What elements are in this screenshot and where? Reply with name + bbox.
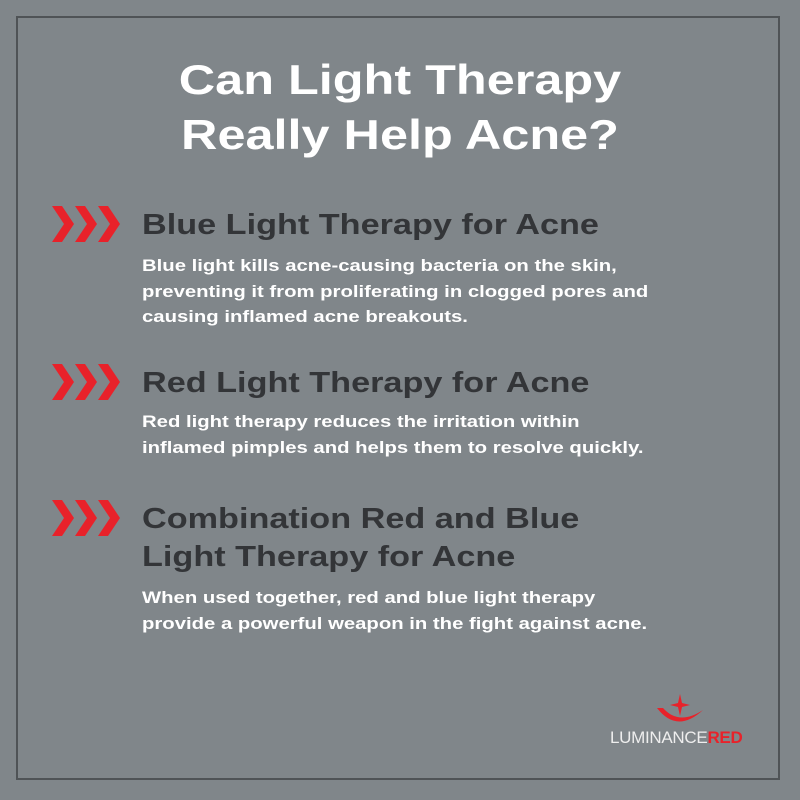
text: combination: provide a powerful weapon in the fight against acne. [142,614,647,632]
heading: combination: Light Therapy for Acne [142,541,515,573]
icon: arrows 3 [52,500,120,536]
text: red: inflamed pimples and helps them to resolve quickly. [142,438,643,456]
heading: red: Red Light Therapy for Acne [142,367,589,399]
text: combination: When used together, red and blue light therapy [142,589,595,607]
text: combination [142,589,647,632]
text: blue: causing inflamed acne breakouts. [142,308,468,326]
icon: logo mark [657,694,703,722]
heading: combination: Combination Red and Blue [142,503,579,535]
text: blue: preventing it from proliferating in clogged pores and [142,282,648,300]
logo [610,694,742,747]
title [179,56,621,158]
text: red: Red light therapy reduces the irritation within [142,413,580,431]
heading: combination [142,503,579,573]
text: blue: Blue light kills acne-causing bacteria on the skin, [142,257,617,275]
title: Really Help Acne? [181,111,619,158]
icon: arrows 1 [52,206,120,242]
text: blue [142,257,648,326]
heading: blue: Blue Light Therapy for Acne [142,209,599,241]
text: red [142,413,643,456]
title: Can Light Therapy [179,56,621,103]
text: logo: LUMINANCERED [610,728,742,747]
icon: arrows 2 [52,364,120,400]
